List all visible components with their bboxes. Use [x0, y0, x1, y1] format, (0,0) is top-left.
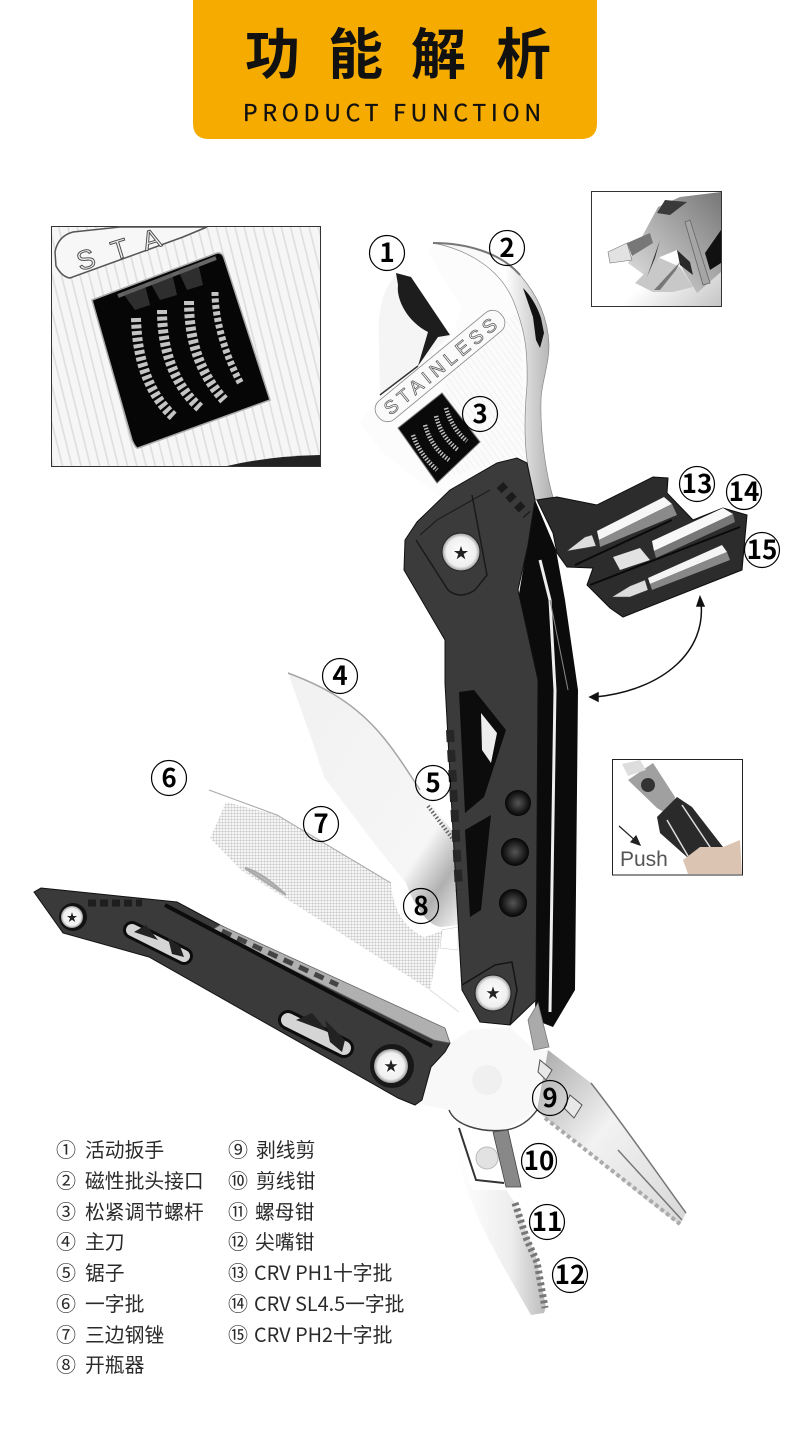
legend column 2: ⑫ [228, 1226, 248, 1255]
callout 8: 8 [413, 886, 429, 923]
blade: file and screwdriver [209, 790, 459, 1012]
legend column 1: ⑤ [56, 1257, 76, 1286]
callout 11: 11 [532, 1202, 562, 1239]
legend column 1: ② [56, 1165, 76, 1194]
handle slots [132, 930, 184, 956]
legend column 2: ⑪ [228, 1196, 248, 1225]
bottom screw [475, 975, 511, 1011]
adjustment screw [398, 393, 480, 483]
subtitle: PRODUCT FUNCTION [243, 94, 541, 128]
inset: adjustment screw close-up: STA [73, 217, 182, 277]
legend column 2: ⑬ [228, 1257, 248, 1286]
bit 14 [613, 508, 735, 570]
legend column 1: 松紧调节螺杆 [85, 1196, 204, 1225]
lower handle [34, 888, 450, 1105]
callout 6 [152, 758, 186, 796]
callout 15: 15 [747, 530, 777, 567]
legend column 1: ① [56, 1134, 76, 1163]
inset: magnetic bit socket [592, 192, 722, 306]
handle plate [404, 458, 538, 1025]
fingers [683, 840, 742, 874]
side rails [518, 500, 578, 1027]
blade: main knife with saw [288, 673, 458, 927]
legend column 1: 主刀 [85, 1226, 125, 1255]
callout 3 [462, 394, 498, 432]
legend column 1: 磁性批头接口 [85, 1165, 204, 1194]
upper handle: ★ [486, 985, 500, 1001]
header banner [193, 0, 597, 139]
inset: push to release [612, 760, 742, 875]
jaw notch [396, 273, 450, 366]
legend column 1: ③ [56, 1196, 76, 1225]
lower handle: ★ [66, 912, 78, 924]
legend column 1: 三边钢锉 [85, 1319, 164, 1348]
top screw [442, 533, 480, 571]
callout 5: 5 [425, 763, 441, 800]
callout 1 [370, 233, 404, 270]
file spine [212, 925, 450, 1043]
callout 7 [304, 804, 338, 842]
title: 功能解析 [245, 10, 551, 90]
pivot screw [370, 1044, 414, 1088]
legend column 1: ④ [56, 1226, 76, 1255]
callout 1: 1 [379, 233, 395, 270]
bit holder [537, 477, 747, 617]
screw [59, 903, 87, 931]
wire cutter [459, 1128, 504, 1183]
callout 5 [416, 763, 450, 800]
lower handle: ★ [384, 1058, 398, 1074]
legend column 2: 螺母钳 [255, 1196, 314, 1225]
push arrow [619, 826, 640, 845]
bit 13 [567, 497, 677, 551]
callout 4 [322, 656, 358, 694]
callout 14: 14 [729, 472, 759, 509]
lower jaw [457, 1143, 546, 1315]
upper handle: ★ [453, 545, 469, 562]
handle cut-outs [459, 690, 506, 813]
legend column 2: ⑨ [228, 1134, 248, 1163]
legend column 1: ⑧ [56, 1349, 76, 1378]
legend column 1: 开瓶器 [85, 1349, 145, 1378]
callout 10: 10 [524, 1141, 554, 1178]
legend column 2 [228, 1134, 404, 1348]
wrench head [360, 243, 553, 505]
legend column 1: 一字批 [85, 1288, 144, 1317]
push label: Push [620, 848, 668, 871]
callout 12: 12 [555, 1255, 585, 1292]
callout 4: 4 [332, 656, 348, 693]
pliers hub [415, 1027, 548, 1131]
inset: adjustment screw close-up [52, 217, 320, 466]
legend column 2: ⑮ [228, 1319, 248, 1348]
legend column 2: CRV PH2十字批 [254, 1319, 392, 1348]
legend column 1 [56, 1134, 204, 1378]
legend column 1: 锯子 [85, 1257, 125, 1286]
stainless engraving: STAINLESS [380, 315, 502, 420]
legend column 2: CRV SL4.5一字批 [254, 1288, 404, 1317]
arrow: bit holder rotation [590, 597, 704, 701]
upper handle [404, 458, 578, 1050]
bit 15 [612, 545, 730, 597]
callout 7: 7 [313, 804, 329, 841]
legend column 2: ⑩ [228, 1165, 248, 1194]
legend column 1: 活动扳手 [85, 1134, 164, 1163]
legend column 1: ⑥ [56, 1288, 76, 1317]
magnet slot [523, 288, 544, 348]
main tool [34, 243, 747, 1315]
callout 3: 3 [472, 394, 488, 431]
callout 9 [532, 1078, 568, 1116]
legend column 2: ⑭ [228, 1288, 248, 1317]
callout 13: 13 [682, 464, 712, 501]
callout 6: 6 [161, 758, 177, 795]
legend column 2: CRV PH1十字批 [254, 1257, 392, 1286]
pliers [415, 1027, 686, 1315]
legend column 1: ⑦ [56, 1319, 76, 1348]
long nose jaw [537, 1050, 686, 1225]
legend [56, 1134, 404, 1378]
callout numbers [152, 228, 780, 1292]
callout 8 [404, 886, 438, 924]
callout 2 [490, 228, 524, 266]
callout 2: 2 [499, 228, 515, 265]
legend column 2: 剪线钳 [256, 1165, 315, 1194]
callout 9: 9 [542, 1078, 558, 1115]
legend column 2: 尖嘴钳 [255, 1226, 314, 1255]
legend column 2: 剥线剪 [256, 1134, 315, 1163]
